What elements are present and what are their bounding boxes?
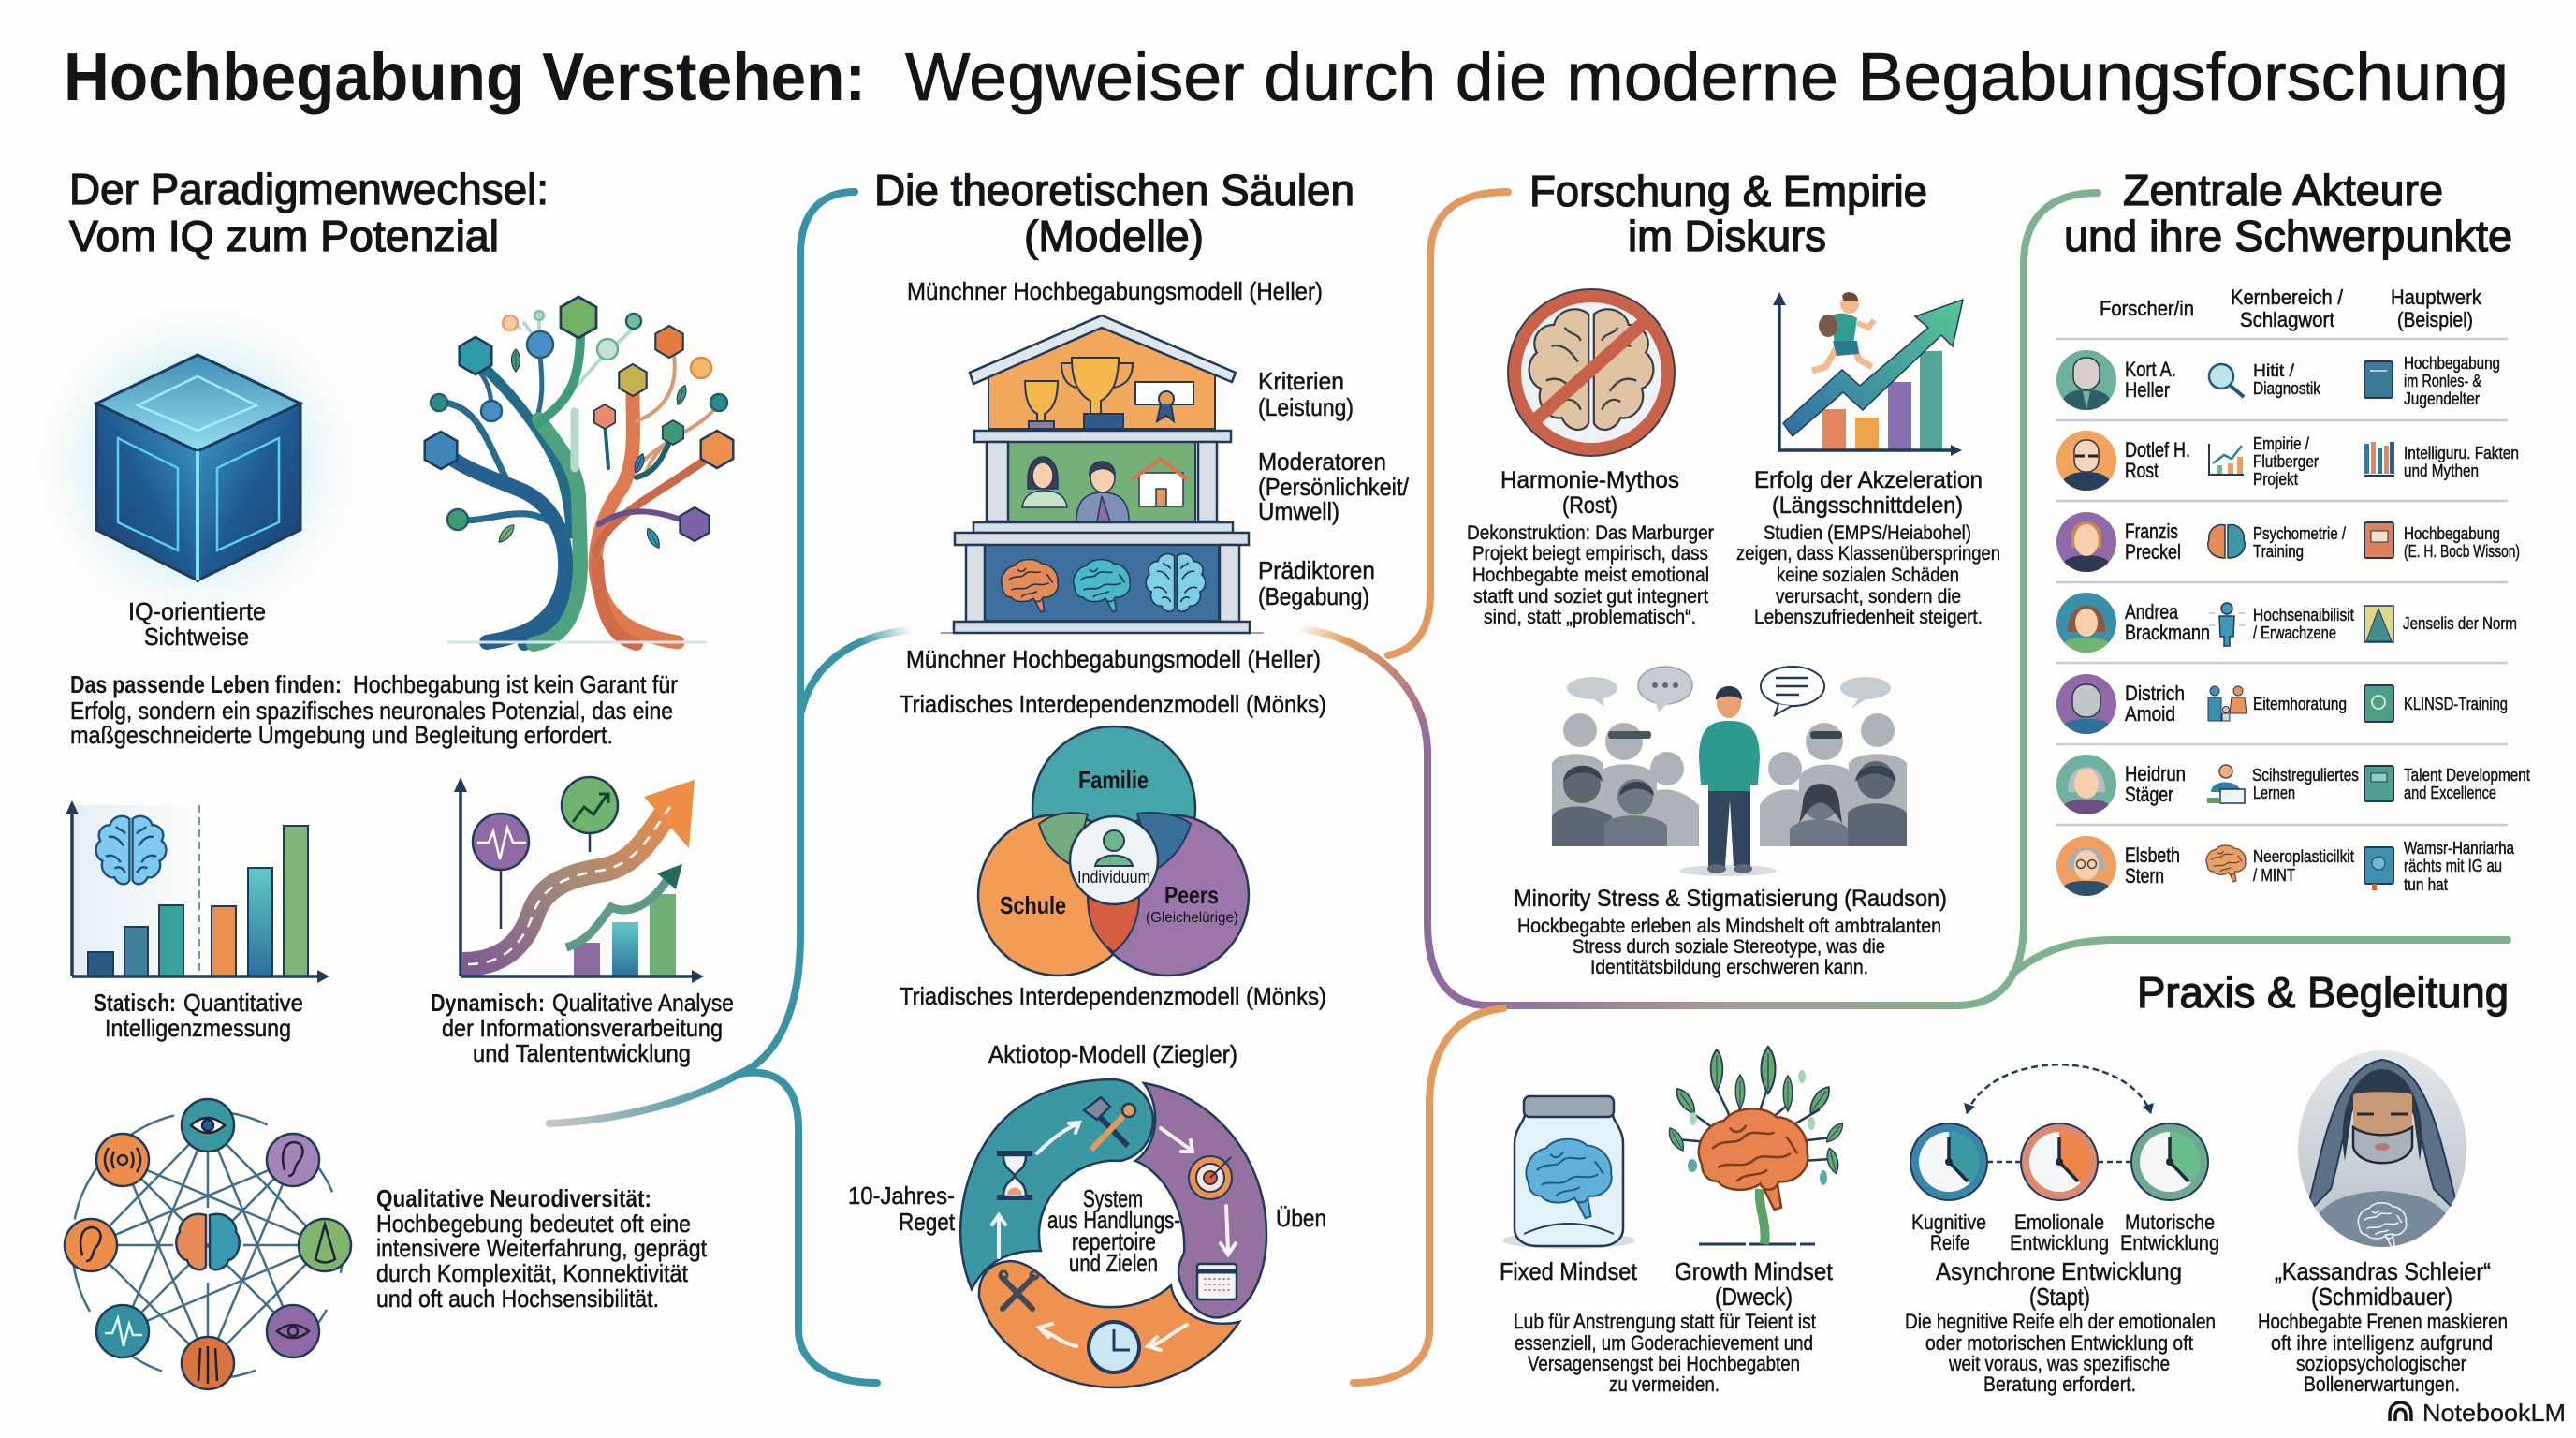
text: Asynchrone Entwicklung: weit voraus, was spezifische bbox=[1948, 1352, 2170, 1375]
text: Minority Stress: Hockbegabte erleben als Mindshelt oft ambtralanten bbox=[1517, 916, 1941, 937]
table header: Forscher/in bbox=[2100, 297, 2194, 320]
text: Das passende Leben finden: Erfolg, sondern ein spazifisches neuronales Potenzial, das eine bbox=[70, 697, 673, 725]
heading: Paradigmenwechsel bbox=[69, 165, 549, 260]
row: Rost: Projekt bbox=[2253, 470, 2298, 489]
row: Heller: im Ronles- & bbox=[2404, 372, 2481, 390]
row: Rost: Intelliguru. Fakten bbox=[2404, 444, 2519, 462]
label: Dynamisch bbox=[431, 989, 734, 1067]
text: cycle center: System bbox=[1083, 1184, 1143, 1212]
row: Stäger: Lernen bbox=[2253, 784, 2295, 802]
row: Preckel: Preckel bbox=[2125, 540, 2181, 564]
text: Das passende Leben finden: Das passende Leben finden: bbox=[70, 670, 342, 698]
heading: Zentrale Akteure: Zentrale Akteure bbox=[2123, 166, 2443, 214]
icon: runner bbox=[1812, 292, 1874, 371]
text: Qualitative Neurodiversität: Hochbegebung bedeutet oft eine bbox=[376, 1210, 691, 1238]
icon: brain in jar bbox=[1502, 1096, 1635, 1249]
label: IQ-orientierte Sichtweise: Sichtweise bbox=[144, 623, 249, 651]
diagram: neurodiversity network bbox=[65, 1099, 351, 1389]
icon: trophies bbox=[1025, 358, 1193, 429]
row: Rost bbox=[2056, 431, 2519, 491]
table header: Kernbereich / bbox=[2231, 286, 2344, 309]
row: Rost: Rost bbox=[2125, 459, 2159, 482]
logo: NotebookLM: NotebookLM bbox=[2422, 1399, 2566, 1427]
row: Stern: Stern bbox=[2125, 864, 2164, 888]
text: Kassandras Schleier: „Kassandras Schleier“ bbox=[2275, 1257, 2491, 1285]
row: Rost: und Mythen bbox=[2404, 462, 2479, 480]
title: Wegweiser durch die moderne Begabungsforschung bbox=[905, 40, 2509, 115]
icon: crossed tools bbox=[1000, 1271, 1038, 1309]
row: Stäger: Talent Development bbox=[2404, 766, 2530, 785]
text: Fixed and Growth Mindset: Fixed Mindset bbox=[1500, 1257, 1638, 1285]
text: cycle center bbox=[1047, 1184, 1180, 1277]
chart: dynamic path bbox=[454, 777, 704, 983]
title bbox=[64, 40, 2509, 115]
text: Asynchrone Entwicklung: Asynchrone Entwicklung bbox=[1936, 1257, 2182, 1285]
row: Arnold: Amoid bbox=[2125, 702, 2175, 726]
row: Preckel: Training bbox=[2253, 542, 2304, 561]
label: Statisch: Intelligenzmessung bbox=[105, 1014, 291, 1042]
text: Asynchrone Entwicklung: Die hegnitive Reife elh der emotionalen bbox=[1905, 1310, 2216, 1333]
heading: Zentrale Akteure: und ihre Schwerpunkte bbox=[2064, 212, 2512, 260]
text: Kassandras Schleier: soziopsychologischer bbox=[2296, 1352, 2466, 1375]
icon: green book bbox=[2364, 685, 2393, 722]
heading: Die theoretischen Säulen: Die theoretischen Säulen bbox=[874, 166, 1354, 214]
diagram: triadic venn: Peers bbox=[1164, 881, 1219, 909]
icon: split brain bbox=[2208, 525, 2245, 558]
heading: Praxis und Begleitung: Praxis & Begleitung bbox=[2137, 968, 2509, 1017]
icon: clock bbox=[1089, 1322, 1139, 1372]
row: Stäger: and Excellence bbox=[2404, 784, 2496, 802]
text: Minority Stress bbox=[1514, 886, 1947, 978]
diagram: triadic venn: (Gleichelürige) bbox=[1146, 910, 1238, 926]
heading: Forschung und Empirie: im Diskurs bbox=[1628, 212, 1826, 260]
text: Asynchrone Entwicklung: (Stapt) bbox=[2029, 1283, 2090, 1311]
icon: blue book bbox=[2364, 847, 2393, 890]
row: Preckel: (E. H. Bocb Wisson) bbox=[2404, 542, 2520, 561]
row: Brackmann: / Erwachzene bbox=[2253, 624, 2336, 642]
icon: calendar bbox=[1197, 1264, 1237, 1299]
text: Asynchrone Entwicklung: Beratung erfordert. bbox=[1983, 1372, 2136, 1396]
icon: people and home bbox=[1022, 457, 1187, 521]
icon: glowing cube bbox=[43, 309, 352, 618]
text: Fixed and Growth Mindset: Versagensengst bei Hochbegabten bbox=[1528, 1352, 1800, 1375]
panel: theoretical pillars bbox=[848, 166, 1410, 1387]
row: Heller: Hochbegabung bbox=[2404, 354, 2500, 373]
row: Stern: tun hat bbox=[2404, 875, 2448, 894]
label: Statisch: Statisch: bbox=[94, 989, 176, 1017]
icon: teal book bbox=[2364, 766, 2393, 801]
icon: orange brain bbox=[2206, 845, 2246, 882]
text: Kassandras Schleier: Bollenerwartungen. bbox=[2304, 1372, 2460, 1396]
text: Erfolg der Akzeleration: Studien (EMPS/Heiabohel) bbox=[1764, 522, 1971, 544]
labels: clock names: Kugnitive bbox=[1911, 1211, 1986, 1234]
icon: three brains bbox=[1002, 554, 1206, 612]
row: Heller: Kort A. bbox=[2125, 358, 2176, 381]
text: Harmonie-Mythos: Dekonstruktion: Das Marburger bbox=[1467, 522, 1714, 544]
row: Stern: Wamsr-Hanriarha bbox=[2404, 839, 2515, 858]
text: Das passende Leben finden: maßgeschneiderte Umgebung und Begleitung erfordert. bbox=[70, 721, 613, 749]
diagram: triadic venn bbox=[978, 726, 1249, 976]
illustration: veiled woman bbox=[2298, 1050, 2466, 1247]
text: Das passende Leben finden bbox=[70, 670, 678, 749]
label: Aktiotop model: Aktiotop-Modell (Ziegler) bbox=[988, 1040, 1237, 1068]
icon: growth brain tree bbox=[1665, 1047, 1846, 1244]
row: Stern: / MINT bbox=[2253, 866, 2295, 885]
text: Kassandras Schleier bbox=[2258, 1257, 2508, 1396]
heading: Forschung und Empirie: Forschung & Empirie bbox=[1530, 167, 1927, 215]
labels: clock names: Entwicklung bbox=[2010, 1231, 2109, 1255]
row: Heller bbox=[2056, 350, 2500, 410]
text: Kassandras Schleier: (Schmidbauer) bbox=[2311, 1283, 2452, 1311]
icon: norm book bbox=[2364, 606, 2393, 642]
text: Fixed and Growth Mindset: Lub für Anstrengung statt für Teient ist bbox=[1514, 1310, 1816, 1333]
text: Erfolg der Akzeleration: verursacht, sondern die bbox=[1776, 586, 1961, 608]
row: Heller: Jugendelter bbox=[2404, 389, 2480, 408]
text: Qualitative Neurodiversität: Qualitative Neurodiversität: bbox=[376, 1184, 651, 1212]
text: Qualitative Neurodiversität: intensivere Weiterfahrung, geprägt bbox=[376, 1234, 708, 1262]
labels: Moderatoren bbox=[1258, 448, 1410, 525]
icon: bars book bbox=[2364, 442, 2394, 476]
heading: Die theoretischen Säulen bbox=[874, 166, 1354, 260]
label: Üben: Üben bbox=[1276, 1204, 1326, 1232]
label: 10-Jahres-Regel bbox=[848, 1181, 956, 1236]
row: Preckel: Hochbegabung bbox=[2404, 524, 2500, 543]
text: Qualitative Neurodiversität: und oft auch Hochsensibilität. bbox=[376, 1284, 659, 1313]
text: cycle center: aus Handlungs- bbox=[1047, 1206, 1180, 1234]
table header: (Beispiel) bbox=[2397, 308, 2473, 331]
text: Fixed and Growth Mindset: (Dweck) bbox=[1715, 1283, 1793, 1311]
row: Rost: Dotlef H. bbox=[2125, 438, 2190, 462]
heading: Paradigmenwechsel: Vom IQ zum Potenzial bbox=[69, 212, 499, 260]
text: Kassandras Schleier: Hochbegabte Frenen maskieren bbox=[2258, 1310, 2508, 1333]
label: Dynamisch: Dynamisch: bbox=[431, 989, 545, 1017]
icon: motor clock bbox=[2131, 1123, 2208, 1200]
labels: Moderatoren: Umwell) bbox=[1258, 497, 1339, 525]
text: Harmonie-Mythos: Hochbegabte meist emotional bbox=[1472, 565, 1709, 586]
chart: acceleration bbox=[1773, 292, 1963, 456]
row: Arnold: Eitemhoratung bbox=[2253, 695, 2347, 713]
text: Fixed and Growth Mindset: essenziell, um Goderachievement und bbox=[1515, 1331, 1813, 1355]
heading: Zentrale Akteure bbox=[2064, 166, 2512, 260]
row: Arnold: KLINSD-Training bbox=[2404, 695, 2508, 713]
icon: no-brain sign bbox=[1508, 289, 1675, 456]
labels: clock names: Reife bbox=[1930, 1231, 1969, 1255]
text: Fixed and Growth Mindset: Growth Mindset bbox=[1675, 1257, 1834, 1285]
labels: Prädiktoren: Prädiktoren bbox=[1258, 556, 1375, 584]
row: Rost: Flutberger bbox=[2253, 452, 2319, 471]
labels: clock names: Emolionale bbox=[2014, 1211, 2104, 1234]
text: Harmonie-Mythos: Projekt beiegt empirisch, dass bbox=[1472, 543, 1708, 565]
text: cycle center: repertoire bbox=[1072, 1227, 1156, 1255]
row: Heller: Diagnostik bbox=[2253, 379, 2321, 398]
text: Harmonie-Mythos: sind, statt „problematisch“. bbox=[1484, 607, 1696, 628]
icon: learner bbox=[2207, 765, 2245, 803]
text: Erfolg der Akzeleration: keine sozialen Schäden bbox=[1777, 565, 1959, 586]
labels: clock names bbox=[1911, 1211, 2219, 1255]
row: Brackmann: Brackmann bbox=[2125, 621, 2210, 644]
label: Münchner model caption: Münchner Hochbegabungsmodell (Heller) bbox=[906, 645, 1321, 673]
labels: Moderatoren: (Persönlichkeit/ bbox=[1258, 473, 1410, 501]
title: Hochbegabung Verstehen: bbox=[64, 40, 866, 115]
icon: cognitive clock bbox=[1910, 1123, 1987, 1200]
label: Dynamisch: Qualitative Analyse bbox=[552, 989, 734, 1017]
row: Preckel: Franzis bbox=[2125, 520, 2178, 543]
row: Brackmann: Jenselis der Norm bbox=[2403, 614, 2517, 633]
labels: Kriterien: (Leistung) bbox=[1258, 393, 1354, 421]
text: Harmonie-Mythos: (Rost) bbox=[1562, 492, 1617, 519]
row: Stäger: Stäger bbox=[2125, 783, 2174, 806]
label: Münchner model top: Münchner Hochbegabungsmodell (Heller) bbox=[907, 277, 1323, 305]
labels: Moderatoren: Moderatoren bbox=[1258, 448, 1386, 476]
row: Preckel bbox=[2056, 512, 2520, 572]
label: Triadisches model caption: Triadisches Interdependenzmodell (Mönks) bbox=[900, 982, 1326, 1010]
labels: Prädiktoren bbox=[1258, 556, 1375, 610]
row: Stern bbox=[2056, 836, 2515, 896]
row: Stäger bbox=[2056, 755, 2530, 814]
row: Stäger: Heidrun bbox=[2125, 762, 2186, 785]
row: Stern: Neeroplasticilkit bbox=[2253, 847, 2354, 866]
icon: target bbox=[1189, 1156, 1232, 1199]
row: Brackmann bbox=[2056, 593, 2517, 653]
diagram: Aktiotop cycle bbox=[960, 1079, 1266, 1387]
labels: Kriterien bbox=[1258, 367, 1354, 421]
text: Minority Stress: Minority Stress & Stigmatisierung (Raudson) bbox=[1514, 886, 1947, 912]
table header: Schlagwort bbox=[2240, 308, 2334, 331]
icon: hammer and wrench bbox=[1084, 1097, 1135, 1150]
heading: Die theoretischen Säulen: (Modelle) bbox=[1024, 212, 1204, 260]
text: Harmonie-Mythos: statft und soziet gut integnert bbox=[1473, 586, 1708, 608]
icon: family bbox=[2208, 686, 2247, 721]
row: Arnold bbox=[2056, 674, 2508, 734]
row: Rost: Empirie / bbox=[2253, 434, 2309, 453]
label: Dynamisch: und Talententwicklung bbox=[473, 1039, 691, 1067]
text: Erfolg der Akzeleration: Erfolg der Akzeleration bbox=[1754, 467, 1983, 493]
icon: emotional clock bbox=[2021, 1123, 2098, 1200]
text: cycle center: und Zielen bbox=[1069, 1249, 1158, 1277]
icon: small chart bbox=[2209, 444, 2244, 475]
text: Qualitative Neurodiversität: durch Komplexität, Konnektivität bbox=[376, 1259, 689, 1287]
text: Kassandras Schleier: oft ihre intelligenz aufgrund bbox=[2271, 1331, 2493, 1355]
label: 10-Jahres-Regel: Reget bbox=[899, 1208, 956, 1236]
row: Brackmann: Andrea bbox=[2125, 600, 2179, 624]
panel: paradigm shift bbox=[43, 165, 734, 1389]
diagram: Munich model building bbox=[941, 315, 1264, 633]
chart: static bars bbox=[66, 800, 329, 983]
heading: Paradigmenwechsel: Der Paradigmenwechsel: bbox=[69, 165, 549, 213]
text: Qualitative Neurodiversität bbox=[376, 1184, 708, 1313]
label: Statisch bbox=[94, 989, 303, 1042]
row: Heller: Hitit / bbox=[2253, 361, 2294, 380]
text: Erfolg der Akzeleration: Lebenszufriedenheit steigert. bbox=[1754, 607, 1983, 628]
labels: clock names: Entwicklung bbox=[2120, 1231, 2219, 1255]
labels: Kriterien: Kriterien bbox=[1258, 367, 1344, 395]
panel: research and empiricism bbox=[1467, 167, 2000, 978]
row: Heller: Heller bbox=[2125, 378, 2170, 402]
text: Fixed and Growth Mindset: zu vermeiden. bbox=[1609, 1372, 1720, 1396]
row: Arnold: Districh bbox=[2125, 682, 2185, 705]
text: Harmonie-Mythos: Harmonie-Mythos bbox=[1500, 467, 1679, 493]
text: Harmonie-Mythos bbox=[1467, 467, 1714, 628]
icon: magnifier bbox=[2209, 364, 2244, 397]
diagram: triadic venn: Familie bbox=[1078, 766, 1149, 794]
labels: clock names: Mutorische bbox=[2125, 1211, 2215, 1234]
panel: key actors table bbox=[2056, 166, 2530, 896]
icon: orange book bbox=[2364, 522, 2393, 558]
text: Minority Stress: Stress durch soziale Stereotype, was die bbox=[1573, 936, 1885, 958]
connector brackets between panels bbox=[549, 192, 2508, 1383]
text: Erfolg der Akzeleration bbox=[1736, 467, 2000, 628]
row: Stäger: Scihstreguliertes bbox=[2252, 766, 2359, 785]
label: Statisch: Quantitative bbox=[183, 989, 303, 1017]
text: Asynchrone Entwicklung: oder motorischen Entwicklung oft bbox=[1925, 1331, 2193, 1355]
row: Brackmann: Hochsenaibilisit bbox=[2253, 606, 2354, 624]
label: 10-Jahres-Regel: 10-Jahres- bbox=[848, 1181, 955, 1210]
label: IQ-orientierte Sichtweise bbox=[128, 597, 266, 651]
label: Triadisches model top: Triadisches Interdependenzmodell (Mönks) bbox=[900, 690, 1326, 718]
diagram: triadic venn: Individuum bbox=[1077, 868, 1150, 887]
table header: Hauptwerk bbox=[2391, 286, 2482, 309]
text: Minority Stress: Identitätsbildung erschweren kann. bbox=[1590, 957, 1868, 978]
icon: sensitive person bbox=[2209, 603, 2245, 646]
diagram: asynchronous clocks bbox=[1910, 1064, 2208, 1200]
icon: potential tree bbox=[425, 297, 733, 644]
text: Erfolg der Akzeleration: zeigen, dass Klassenüberspringen bbox=[1736, 543, 2000, 565]
text: Erfolg der Akzeleration: (Längsschnittdelen) bbox=[1772, 492, 1963, 519]
row: Stern: rächts mit IG au bbox=[2404, 857, 2502, 875]
table header bbox=[2100, 286, 2482, 331]
text: Das passende Leben finden: Hochbegabung ist kein Garant für bbox=[353, 670, 678, 698]
panel: practice and guidance bbox=[1500, 968, 2509, 1396]
label: IQ-orientierte Sichtweise: IQ-orientierte bbox=[128, 597, 266, 625]
icon: book bbox=[2364, 361, 2393, 398]
diagram: triadic venn: Schule bbox=[1000, 891, 1066, 919]
heading: Forschung und Empirie bbox=[1530, 167, 1927, 260]
illustration: person amid crowd bbox=[1552, 667, 1907, 876]
row: Stern: Elsbeth bbox=[2125, 844, 2180, 867]
icon: hourglass bbox=[997, 1153, 1032, 1197]
row: Preckel: Psychometrie / bbox=[2253, 524, 2346, 543]
text: Fixed and Growth Mindset bbox=[1500, 1257, 1834, 1396]
labels: Prädiktoren: (Begabung) bbox=[1258, 582, 1369, 610]
text: Asynchrone Entwicklung bbox=[1905, 1257, 2216, 1396]
label: Dynamisch: der Informationsverarbeitung bbox=[442, 1014, 723, 1042]
